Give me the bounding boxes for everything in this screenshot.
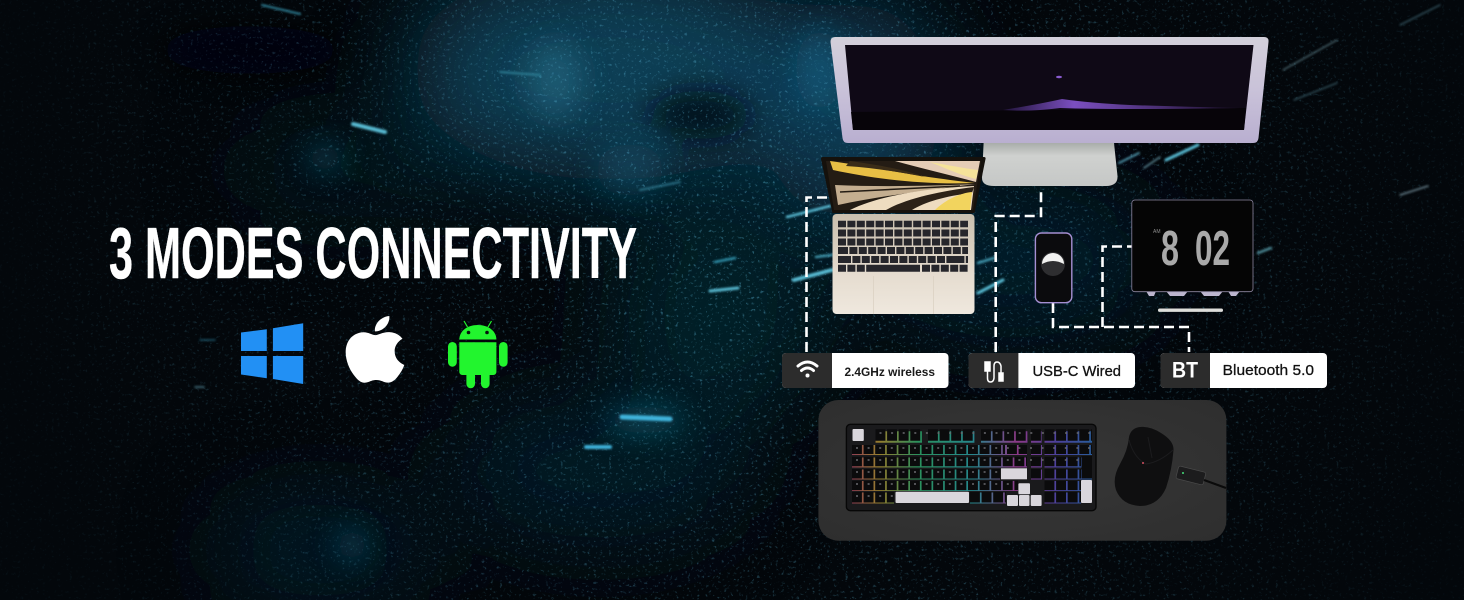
label: bluetooth 5.0	[1160, 353, 1327, 388]
numpad tall key	[1082, 456, 1092, 478]
label: 2.4GHz wireless	[782, 353, 948, 388]
connector lines: dashed	[806, 190, 1189, 352]
mouse	[1115, 427, 1174, 506]
icon: apple	[346, 316, 404, 383]
icon: android	[448, 321, 508, 388]
tablet	[1132, 200, 1253, 312]
heading: 3 modes connectivity: 3 MODES CONNECTIVITY	[109, 214, 637, 294]
monitor screen	[845, 45, 1254, 130]
monitor stand	[982, 143, 1118, 186]
laptop base	[832, 214, 974, 314]
label: USB-C wired	[968, 353, 1135, 388]
tablet body	[1132, 200, 1253, 292]
panel: desk pad	[818, 400, 1226, 541]
icon: wifi	[798, 362, 817, 377]
monitor	[830, 37, 1269, 186]
RGB underglow	[852, 437, 1092, 498]
phone	[1035, 233, 1072, 303]
phone body	[1035, 233, 1072, 303]
usb dongle	[1176, 466, 1226, 488]
tablet feet	[1146, 291, 1240, 296]
icon: windows	[241, 323, 303, 384]
label text: 2.4GHz wireless	[844, 365, 935, 379]
laptop screen with wallpaper	[821, 157, 986, 213]
laptop keyboard	[838, 224, 968, 268]
icon: usb cable	[985, 362, 1003, 382]
black keycaps	[852, 435, 1092, 497]
white keycaps	[852, 429, 1092, 506]
keyboard case	[846, 424, 1096, 511]
laptop	[821, 157, 986, 314]
label text: USB-C Wired	[1032, 363, 1121, 380]
tablet clock AM: AM	[1153, 229, 1160, 235]
tablet clock hour: 8	[1161, 222, 1179, 276]
icon: BT text: BT	[1172, 357, 1198, 382]
stylus pen	[1158, 308, 1223, 312]
key legends	[852, 433, 1092, 496]
phone wallpaper moon	[1041, 252, 1065, 276]
keyboard	[846, 424, 1096, 511]
monitor frame	[830, 37, 1269, 143]
tablet clock minutes: 02	[1195, 222, 1230, 276]
label text: Bluetooth 5.0	[1223, 362, 1314, 379]
